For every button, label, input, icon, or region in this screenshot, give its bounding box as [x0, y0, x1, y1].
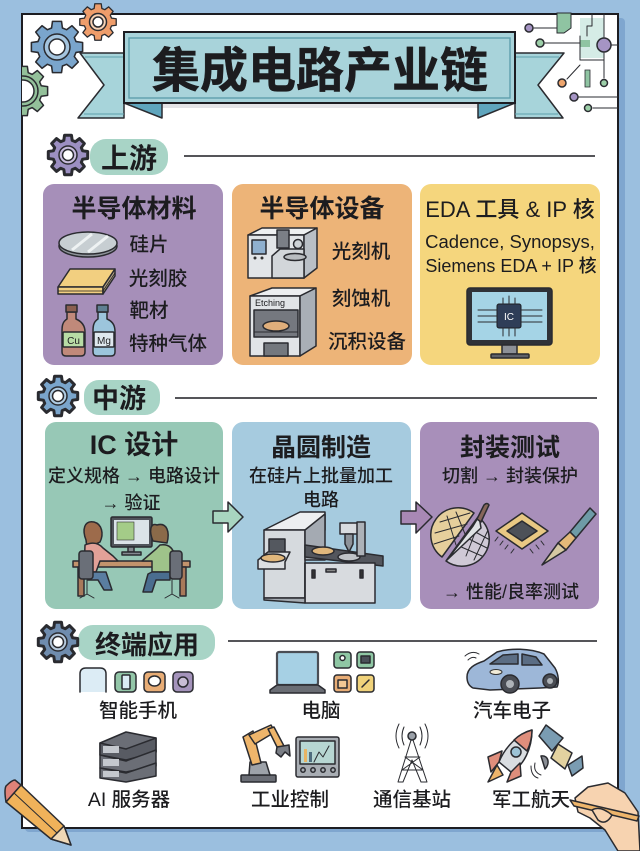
icon: phone and app tiles [80, 668, 193, 692]
icon: satellite [531, 725, 583, 778]
panel: semiconductor materials [43, 184, 223, 365]
icon: laptop and app tiles [270, 652, 374, 693]
panel: semiconductor materials: 特种气体 [129, 333, 207, 355]
icon: chip package [495, 513, 548, 553]
icon: Mg bottle: Mg [97, 336, 111, 347]
panel: wafer fabrication: 在硅片上批量加工 [249, 466, 393, 486]
icon: engineers at a workstation [73, 517, 190, 598]
application: industrial control: 工业控制 [251, 789, 329, 811]
application: AI server [88, 732, 171, 811]
panel: packaging and test [420, 422, 599, 609]
panel: EDA tools and IP: Cadence, Synopsys, [425, 231, 595, 252]
icon: EDA monitor: IC [504, 312, 514, 323]
panel: semiconductor materials: 半导体材料 [71, 195, 197, 223]
icon: circuit traces top right [525, 13, 618, 112]
icon: hand holding pencil [570, 783, 640, 851]
panel: semiconductor equipment: 刻蚀机 [332, 288, 391, 310]
panel: semiconductor materials: 硅片 [129, 234, 169, 256]
icon: Mg bottle [93, 305, 115, 356]
section header: upstream: 上游 [101, 143, 157, 174]
icon: pencil bottom left [5, 780, 71, 845]
icon: wafer dicing [431, 504, 490, 566]
panel: packaging and test: 封装测试 [460, 434, 560, 462]
panel: packaging and test: → 性能/良率测试 [443, 582, 579, 602]
application: automotive electronics [465, 649, 558, 722]
application: military and aerospace: 军工航天 [492, 789, 570, 811]
panel: semiconductor materials: 光刻胶 [129, 268, 187, 290]
icon: signal tower [396, 724, 428, 782]
title: 集成电路产业链 [152, 45, 488, 98]
application: computer [270, 652, 374, 722]
title ribbon [78, 32, 564, 118]
icon: Cu bottle: Cu [67, 336, 80, 347]
icon: test probe [542, 508, 596, 565]
panel: wafer fabrication: 电路 [303, 490, 339, 510]
panel: IC design: IC 设计 [90, 430, 178, 460]
panel: IC design: 定义规格 → 电路设计 [48, 466, 220, 486]
icon: connected car [465, 649, 558, 693]
panel: wafer fabrication: 晶圆制造 [271, 434, 371, 462]
section header: end applications [38, 622, 597, 662]
icon: lithography machine [248, 228, 317, 278]
panel: semiconductor equipment: 光刻机 [332, 241, 391, 263]
icon: top-left gears [22, 3, 117, 116]
icon: silicon wafer [59, 232, 117, 257]
application: telecom base station: 通信基站 [373, 789, 451, 811]
section header: end applications: 终端应用 [95, 630, 199, 660]
panel: IC design [45, 422, 223, 609]
panel: EDA tools and IP: Siemens EDA + IP 核 [425, 256, 597, 276]
icon: server rack [100, 732, 156, 782]
application: industrial control [241, 725, 339, 811]
panel: semiconductor equipment [232, 184, 412, 365]
panel: EDA tools and IP [420, 184, 600, 365]
icon: robot arm [241, 725, 290, 782]
icon: EDA monitor [467, 288, 552, 358]
arrow: fabrication to packaging [401, 502, 432, 533]
icon: etching machine [250, 288, 316, 356]
panel: IC design: → 验证 [101, 493, 161, 513]
application: telecom base station [373, 724, 451, 811]
icon: control panel [296, 737, 339, 777]
application: military and aerospace [488, 725, 583, 811]
icon: Cu bottle [62, 305, 85, 356]
icon: etching machine: Etching [255, 298, 285, 308]
panel: packaging and test: 切割 → 封装保护 [442, 466, 578, 486]
icon: photoresist block [58, 269, 115, 294]
panel: semiconductor equipment: 沉积设备 [328, 331, 406, 353]
panel: semiconductor equipment: 半导体设备 [259, 195, 385, 223]
application: automotive electronics: 汽车电子 [473, 700, 551, 722]
icon: wafer fab machine [258, 512, 383, 603]
panel: wafer fabrication [232, 422, 411, 609]
section header: upstream [48, 135, 595, 175]
section header: midstream [38, 376, 597, 416]
application: AI server: AI 服务器 [88, 789, 171, 811]
panel: semiconductor materials: 靶材 [129, 300, 169, 322]
section header: midstream: 中游 [92, 384, 146, 414]
application: smartphone [80, 668, 193, 722]
application: computer: 电脑 [301, 700, 341, 722]
application: smartphone: 智能手机 [99, 700, 177, 722]
panel: EDA tools and IP: EDA 工具 & IP 核 [425, 197, 595, 222]
icon: rocket [488, 730, 532, 782]
arrow: design to fabrication [213, 502, 243, 532]
